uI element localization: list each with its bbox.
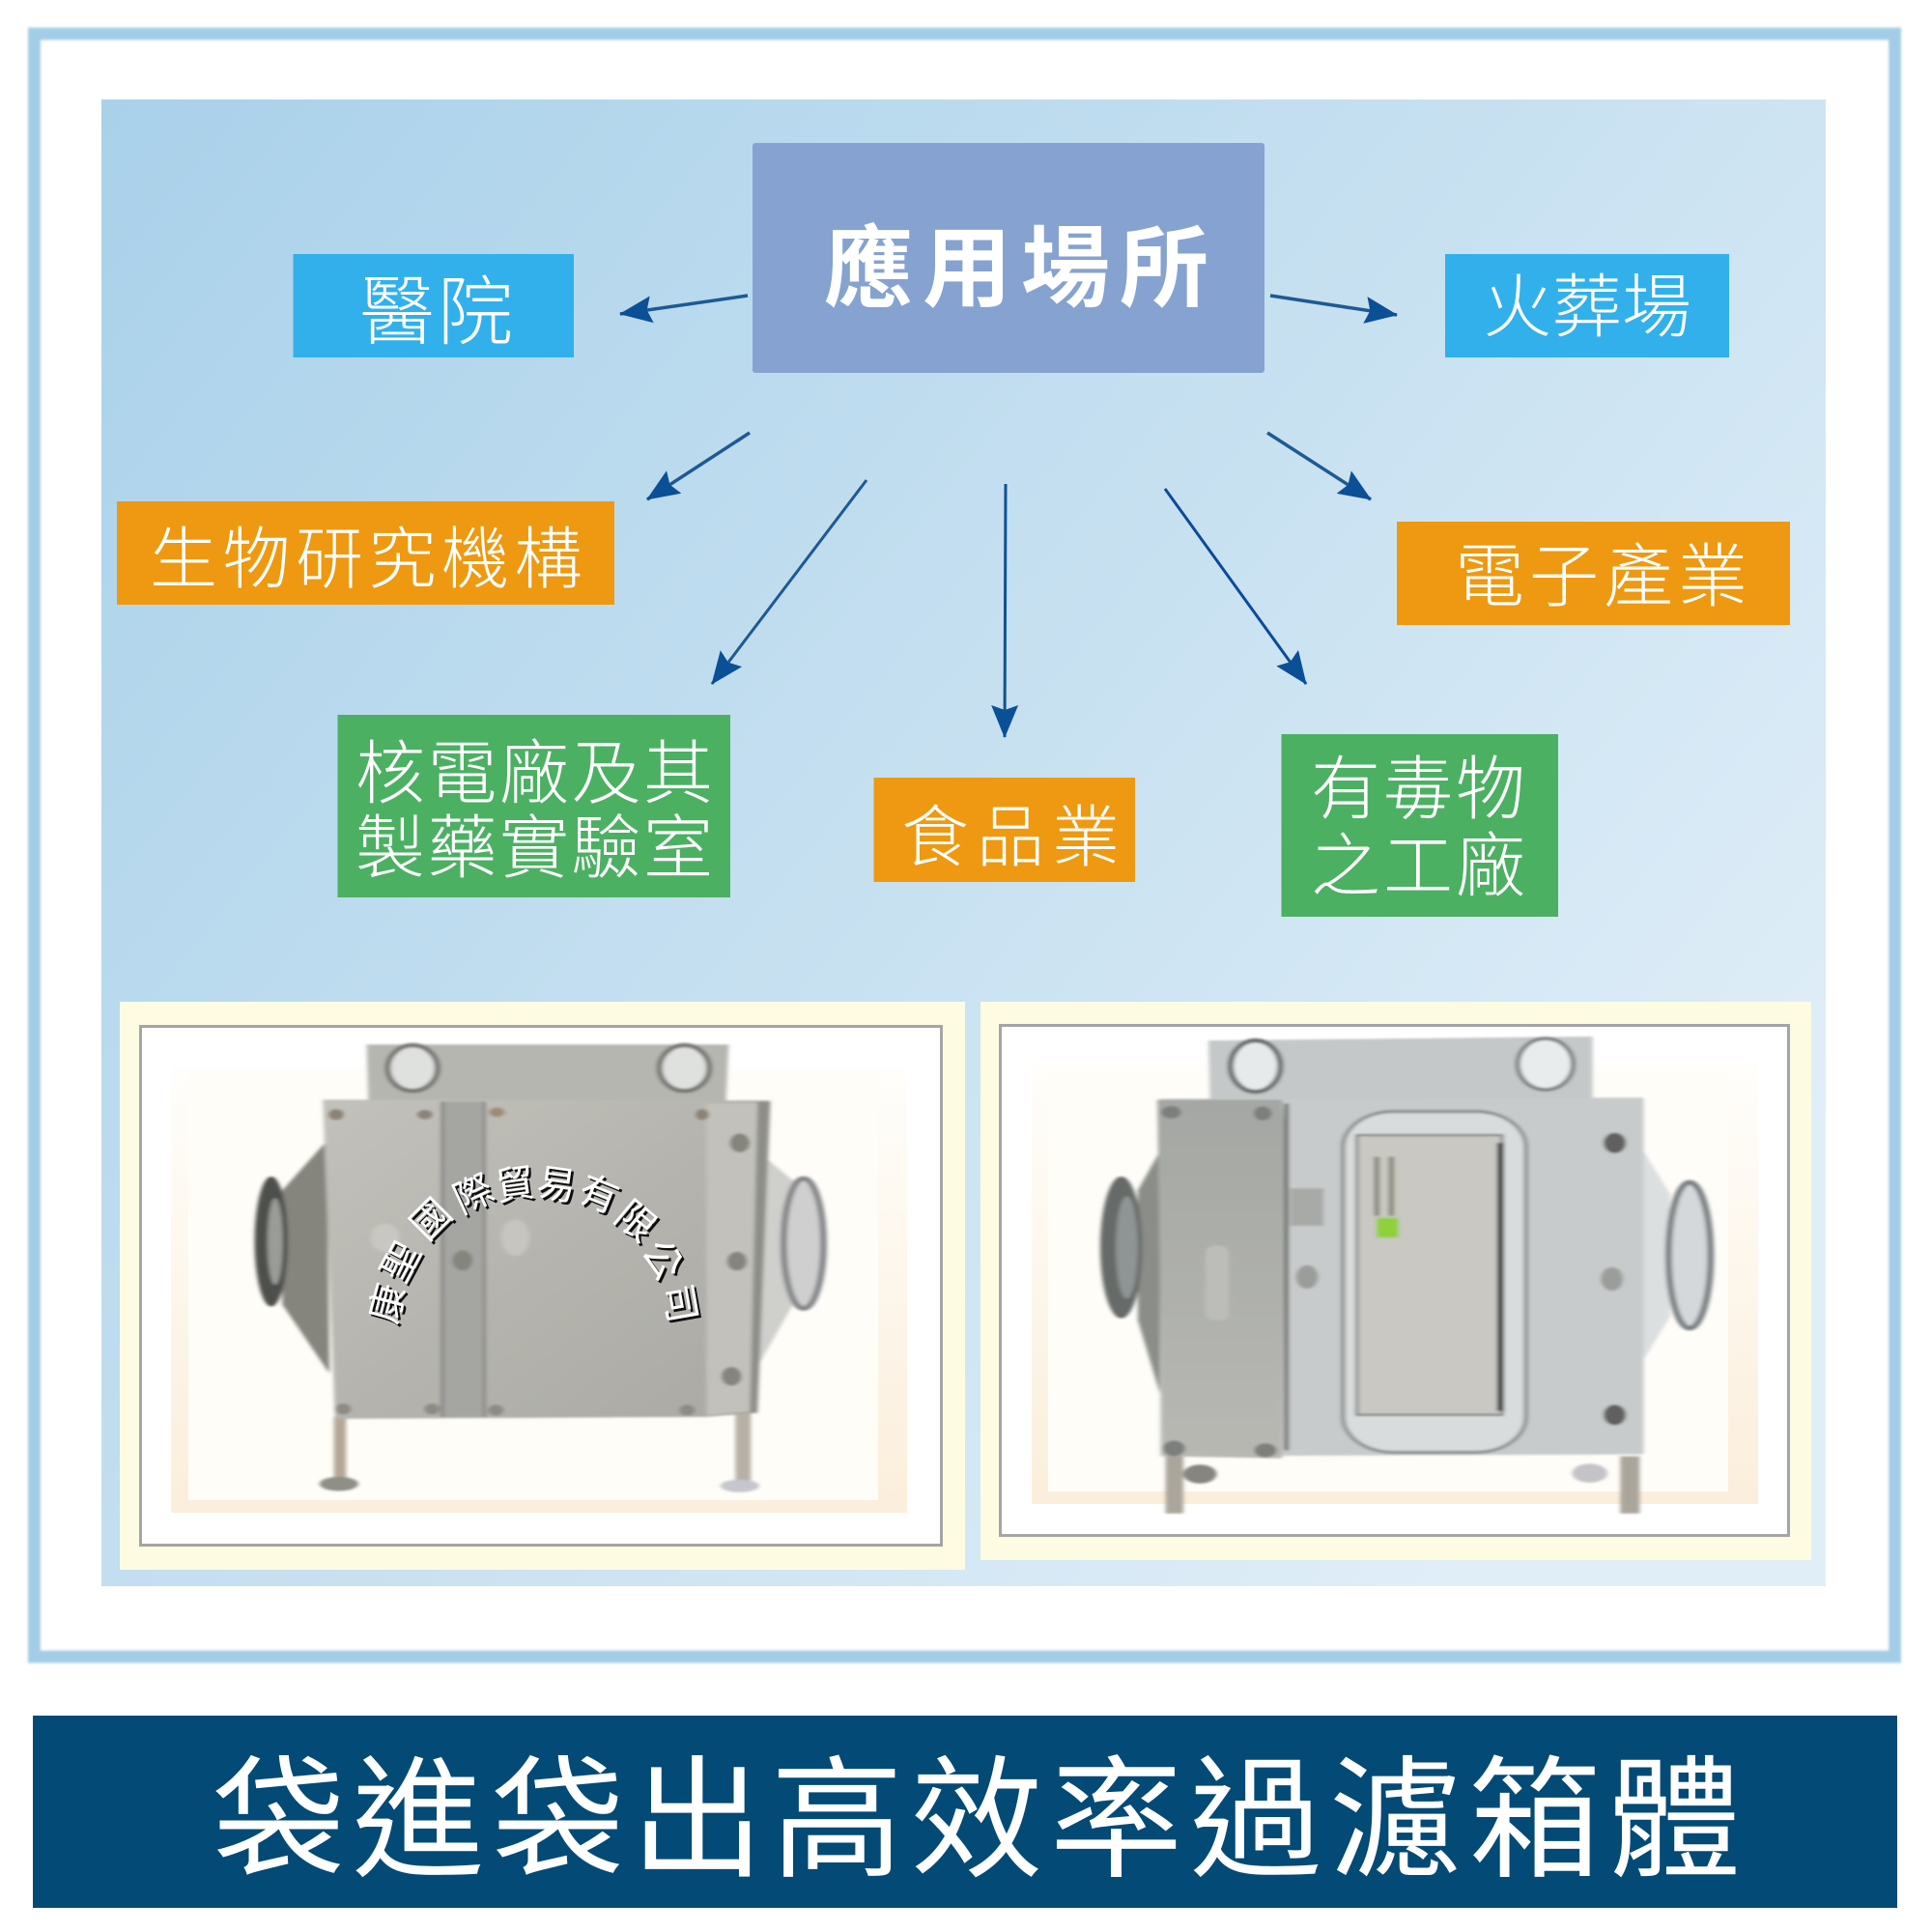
- arrow: to 食品業: [1005, 484, 1006, 737]
- arrow: to 核電廠: [712, 480, 867, 684]
- watermark: curved company name: 易: [534, 1161, 579, 1209]
- arrow: to 生物研究機構: [647, 433, 750, 499]
- arrow: to 火葬場: [1270, 296, 1397, 315]
- title banner: 袋進袋出高效率過濾箱體: [213, 1747, 1748, 1895]
- box: 生物研究機構: 生物研究機構: [150, 522, 587, 597]
- watermark: curved company name: 司: [655, 1281, 703, 1326]
- box: 食品業: [873, 778, 1135, 882]
- box: 有毒物之工廠: 之工廠: [1311, 829, 1528, 906]
- box: 核電廠及其製藥實驗室: [338, 715, 730, 897]
- watermark: curved company name: 公: [634, 1233, 690, 1288]
- box: 醫院: [294, 254, 574, 357]
- panel: blue background: [101, 99, 1826, 1586]
- box: 食品業: 食品業: [901, 800, 1127, 875]
- box: 生物研究機構: [117, 501, 614, 605]
- watermark: curved company name: 聖: [374, 1235, 430, 1289]
- watermark: curved company name: 國: [403, 1191, 460, 1248]
- watermark: curved company name: 際: [447, 1168, 500, 1222]
- watermark: curved company name: 有: [573, 1168, 624, 1222]
- box: 醫院: 醫院: [359, 270, 516, 355]
- box: 核電廠及其製藥實驗室: 製藥實驗室: [355, 810, 716, 888]
- box: 核電廠及其製藥實驗室: 核電廠及其: [355, 736, 716, 813]
- box: 火葬場: 火葬場: [1483, 270, 1691, 347]
- photo panel: left filter housing: [120, 1002, 965, 1570]
- center box: 應用場所: 應用場所: [824, 220, 1218, 319]
- title banner: [33, 1716, 1897, 1908]
- arrow: to 醫院: [620, 296, 748, 314]
- watermark: curved company name: 康: [363, 1279, 413, 1327]
- watermark: curved company name: 貿: [493, 1161, 537, 1209]
- machine: closed housing: [255, 1044, 824, 1492]
- watermark: curved company name: [363, 1161, 703, 1327]
- machine: open housing: [1100, 1037, 1711, 1514]
- arrow: to 有毒物之工廠: [1165, 489, 1306, 684]
- box: 火葬場: [1445, 254, 1729, 357]
- center box: 應用場所: [753, 143, 1264, 373]
- box: 電子產業: [1397, 522, 1790, 625]
- photo panel: right filter housing: [980, 1002, 1811, 1560]
- box: 電子產業: 電子產業: [1455, 539, 1752, 616]
- watermark: curved company name: 限: [607, 1193, 664, 1250]
- arrow: to 電子產業: [1267, 433, 1371, 499]
- box: 有毒物之工廠: [1281, 734, 1558, 917]
- box: 有毒物之工廠: 有毒物: [1311, 752, 1528, 829]
